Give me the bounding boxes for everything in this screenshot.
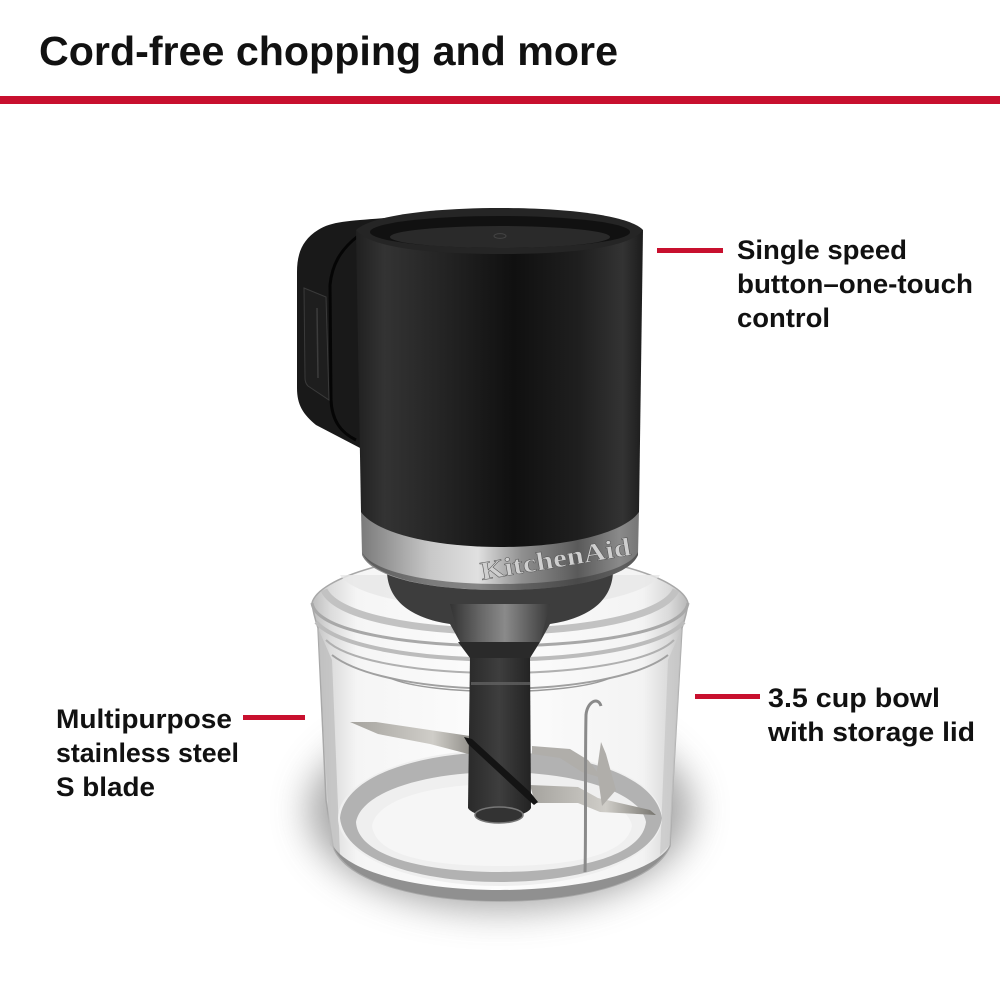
handle [297,218,385,449]
callout: blade [56,704,305,802]
motor body [356,208,643,547]
bowl walls [318,628,340,855]
bowl base ring [338,750,662,886]
lid rim [312,603,688,646]
callout: blade: Multipurpose [56,704,232,734]
callout: single speed button: button–one-touch [737,269,973,299]
callout: single speed button [657,235,973,333]
header rule [0,96,1000,104]
stainless steel S blade [350,722,656,815]
floor shadow [308,710,692,910]
callout: blade: stainless steel [56,738,239,768]
product: cordless food chopper [297,208,692,910]
callout: single speed button: Single speed [737,235,907,265]
brand logo: KitchenAid [478,532,634,586]
safety hook wire [585,701,601,872]
callout: bowl: 3.5 cup bowl [768,683,940,713]
bowl with storage lid [312,552,688,901]
motor collar underside [387,572,613,642]
callout: single speed button: control [737,303,830,333]
drive shaft [458,642,540,823]
side release button [304,288,329,400]
steel band [361,510,639,590]
callout: bowl [695,683,975,747]
title: Cord-free chopping and more [39,28,618,74]
callout: blade: S blade [56,772,155,802]
callout: bowl: with storage lid [767,717,975,747]
